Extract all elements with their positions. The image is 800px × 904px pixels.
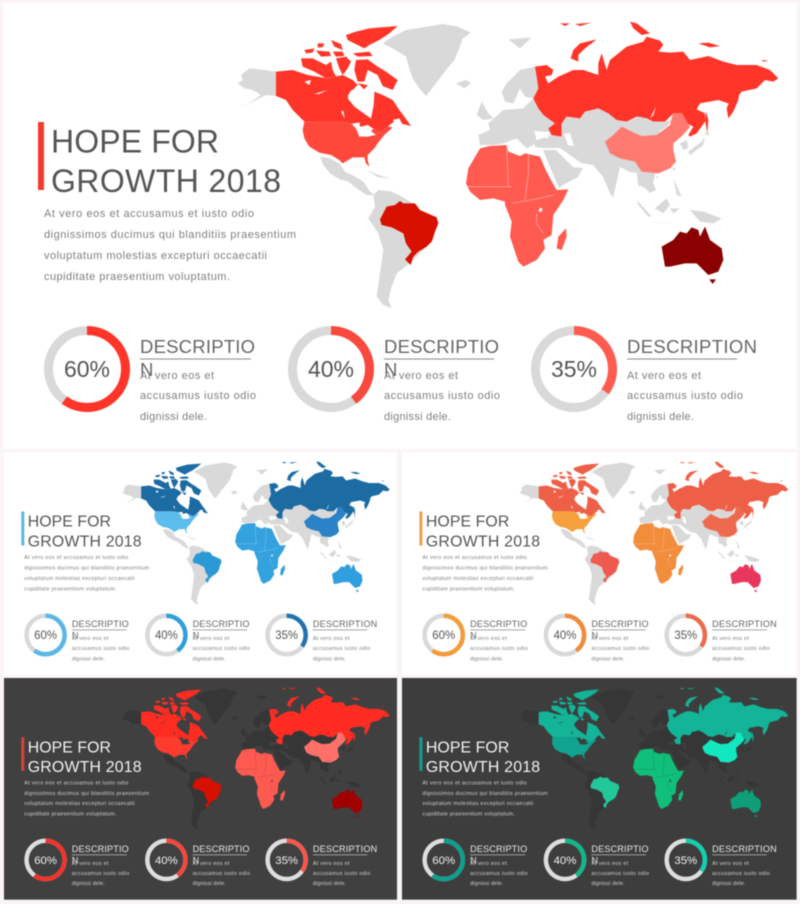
donut chart: 60%: 60% [34, 855, 57, 867]
description 3: dignissi dele. [712, 656, 746, 663]
intro paragraph: cupiditate praesentium voluptatum. [24, 586, 117, 593]
donut chart: 40%: 40% [554, 855, 576, 867]
donut chart: 40% [546, 616, 584, 654]
description 3: At vero eos et [712, 636, 749, 642]
description 2: accusamus iusto odio [591, 646, 649, 652]
description 2: accusamus iusto odio [193, 871, 250, 877]
title: HOPE FOR [51, 124, 219, 160]
donut chart: 40% [292, 330, 370, 408]
description 1: accusamus iusto odio [140, 390, 256, 402]
slide background [402, 678, 797, 900]
donut chart: 60% [27, 841, 65, 879]
donut chart: 35%: 35% [551, 356, 597, 382]
description 3: At vero eos et [313, 861, 350, 867]
intro paragraph: dignissimos ducimus qui blanditiis praesentium [44, 229, 296, 241]
description 1: At vero eos et [72, 636, 109, 642]
donut chart: 35%: 35% [674, 630, 697, 642]
donut chart: 60%: 60% [432, 855, 455, 867]
description 2: accusamus iusto odio [193, 646, 250, 652]
accent bar [419, 512, 422, 546]
description 2: N [591, 630, 598, 641]
title: GROWTH 2018 [51, 163, 281, 199]
donut chart: 60%: 60% [432, 630, 455, 642]
description 1 [470, 619, 528, 663]
donut chart: 60%: 60% [64, 356, 110, 382]
intro paragraph: voluptatum molestias excepturi occaecatii [24, 801, 135, 807]
description 1: accusamus iusto odio [470, 871, 528, 877]
title [28, 739, 142, 776]
world map [520, 461, 788, 605]
description 1 [72, 619, 129, 663]
donut chart: 35% [667, 616, 705, 654]
description 2: DESCRIPTIO [591, 619, 649, 629]
donut chart: 40%: 40% [554, 630, 576, 642]
world map [520, 687, 788, 830]
description 3: dignissi dele. [627, 411, 694, 423]
slide background [402, 452, 797, 675]
description 1: At vero eos et [72, 861, 109, 867]
description 1: dignissi dele. [470, 656, 504, 663]
description 2: N [193, 630, 199, 641]
description 3: At vero eos et [627, 370, 701, 382]
title [51, 124, 281, 199]
description 2: N [384, 359, 397, 380]
intro paragraph [24, 780, 150, 818]
description 1: DESCRIPTIO [470, 619, 527, 629]
description 1: dignissi dele. [72, 881, 105, 887]
description 1: accusamus iusto odio [470, 646, 528, 652]
panel: orange slide [402, 452, 797, 675]
title: HOPE FOR [426, 514, 509, 531]
intro paragraph: voluptatum molestias excepturi occaecatii [24, 576, 135, 582]
donut chart: 40% [546, 841, 584, 879]
donut chart: 40% [147, 841, 185, 879]
panel: blue slide [4, 452, 397, 675]
description 3: accusamus iusto odio [712, 646, 770, 652]
description 2 [193, 619, 250, 663]
intro paragraph: cupiditate praesentium voluptatum. [422, 586, 515, 593]
description 1: dignissi dele. [72, 656, 105, 663]
accent bar [419, 737, 422, 771]
description 3: DESCRIPTION [627, 336, 757, 357]
description 2 [384, 336, 500, 423]
description 2: At vero eos et [384, 370, 458, 382]
description 2 [193, 844, 250, 887]
donut chart: 35% [268, 616, 306, 654]
description 2: DESCRIPTIO [591, 844, 649, 854]
description 3: At vero eos et [712, 861, 749, 867]
slide background [4, 452, 397, 675]
description 2: N [591, 855, 598, 865]
world map [238, 22, 778, 308]
intro paragraph: dignissimos ducimus qui blanditiis praesentium [422, 791, 548, 797]
description 2: accusamus iusto odio [384, 390, 500, 402]
donut chart: 40% [147, 616, 185, 654]
description 1: At vero eos et [140, 370, 214, 382]
description 2: At vero eos et [193, 861, 230, 867]
description 2: At vero eos et [591, 636, 629, 642]
panel: dark red slide [4, 678, 397, 900]
description 3 [313, 844, 377, 887]
description 3 [627, 336, 757, 423]
description 1: dignissi dele. [470, 881, 504, 887]
description 3: accusamus iusto odio [712, 871, 770, 877]
title: GROWTH 2018 [28, 759, 142, 776]
intro paragraph [422, 780, 548, 818]
title [426, 739, 540, 776]
donut chart: 35%: 35% [674, 855, 697, 867]
donut chart: 40%: 40% [308, 356, 354, 382]
description 3 [313, 619, 377, 663]
description 2: dignissi dele. [591, 656, 625, 663]
title [426, 514, 540, 551]
donut chart: 35%: 35% [275, 630, 298, 642]
description 3 [712, 619, 777, 663]
description 2 [591, 619, 649, 663]
intro paragraph: cupiditate praesentium voluptatum. [44, 271, 230, 283]
description 1: N [470, 630, 477, 641]
description 3: DESCRIPTION [313, 844, 377, 854]
donut chart: 60% [425, 616, 463, 654]
donut chart: 35% [536, 330, 612, 408]
description 2: accusamus iusto odio [591, 871, 649, 877]
donut chart: 60% [48, 330, 126, 408]
donut chart: 60% [425, 841, 463, 879]
description 2: dignissi dele. [384, 411, 451, 423]
intro paragraph: dignissimos ducimus qui blanditiis praesentium [24, 565, 149, 572]
donut chart: 40%: 40% [155, 855, 178, 867]
intro paragraph: voluptatum molestias excepturi occaecatii [422, 801, 533, 807]
donut chart: 40%: 40% [155, 630, 178, 642]
description 1: N [140, 359, 153, 380]
description 2: DESCRIPTIO [384, 336, 499, 357]
description 3: dignissi dele. [313, 881, 347, 887]
intro paragraph: At vero eos et accusamus et iusto odio [44, 208, 254, 220]
description 2: DESCRIPTIO [193, 844, 250, 854]
description 1 [72, 844, 129, 887]
intro paragraph: voluptatum molestias excepturi occaecatii [44, 250, 267, 262]
description 3: DESCRIPTION [712, 844, 777, 854]
donut chart: 35% [667, 841, 705, 879]
slide background [4, 678, 397, 900]
intro paragraph [24, 555, 149, 593]
description 1 [140, 336, 256, 423]
description 2: N [193, 855, 199, 865]
description 1: accusamus iusto odio [72, 646, 129, 652]
intro paragraph: cupiditate praesentium voluptatum. [422, 812, 515, 818]
description 3: dignissi dele. [712, 881, 746, 887]
description 1: DESCRIPTIO [72, 844, 129, 854]
intro paragraph: voluptatum molestias excepturi occaecatii [422, 576, 533, 582]
world map [122, 687, 390, 830]
description 3: accusamus iusto odio [627, 390, 743, 402]
description 1: N [470, 855, 477, 865]
donut chart: 35% [268, 841, 306, 879]
panel: main red slide [3, 3, 797, 449]
donut chart: 35%: 35% [275, 855, 298, 867]
description 1: At vero eos et [470, 636, 507, 642]
description 3: DESCRIPTION [313, 619, 377, 629]
intro paragraph: At vero eos et accusamus et iusto odio [24, 555, 128, 561]
description 1: N [72, 855, 78, 865]
accent bar [21, 737, 24, 771]
description 1: dignissi dele. [140, 411, 207, 423]
description 2 [591, 844, 649, 887]
intro paragraph: At vero eos et accusamus et iusto odio [24, 780, 128, 786]
description 2: At vero eos et [193, 636, 230, 642]
description 2: dignissi dele. [193, 656, 226, 663]
title: GROWTH 2018 [426, 759, 540, 776]
panel: dark green slide [402, 678, 797, 900]
description 1: At vero eos et [470, 861, 507, 867]
description 3: At vero eos et [313, 636, 350, 642]
donut chart: 60% [27, 616, 65, 654]
description 1: N [72, 630, 78, 641]
description 2: dignissi dele. [193, 881, 226, 887]
description 1: accusamus iusto odio [72, 871, 129, 877]
description 3: dignissi dele. [313, 656, 347, 663]
world map [122, 461, 390, 605]
description 2: dignissi dele. [591, 881, 625, 887]
donut chart: 60%: 60% [34, 630, 57, 642]
accent bar [21, 512, 24, 546]
intro paragraph: At vero eos et accusamus et iusto odio [422, 555, 527, 561]
intro paragraph: dignissimos ducimus qui blanditiis praesentium [24, 791, 150, 797]
title: HOPE FOR [426, 739, 509, 756]
slide background [3, 3, 797, 449]
title: HOPE FOR [28, 739, 111, 756]
intro paragraph: cupiditate praesentium voluptatum. [24, 812, 117, 818]
description 2: DESCRIPTIO [193, 619, 250, 629]
description 3 [712, 844, 777, 887]
title: GROWTH 2018 [28, 533, 142, 551]
accent bar [38, 122, 44, 190]
title: HOPE FOR [28, 514, 111, 531]
title [28, 514, 142, 551]
description 3: DESCRIPTION [712, 619, 777, 629]
intro paragraph: At vero eos et accusamus et iusto odio [422, 780, 527, 786]
title: GROWTH 2018 [426, 533, 540, 551]
description 3: accusamus iusto odio [313, 646, 370, 652]
description 1: DESCRIPTIO [140, 336, 255, 357]
intro paragraph [422, 555, 548, 593]
description 3: accusamus iusto odio [313, 871, 370, 877]
description 2: At vero eos et [591, 861, 629, 867]
description 1: DESCRIPTIO [470, 844, 527, 854]
intro paragraph [44, 208, 296, 283]
description 1 [470, 844, 528, 887]
intro paragraph: dignissimos ducimus qui blanditiis praesentium [422, 565, 548, 572]
description 1: DESCRIPTIO [72, 619, 129, 629]
